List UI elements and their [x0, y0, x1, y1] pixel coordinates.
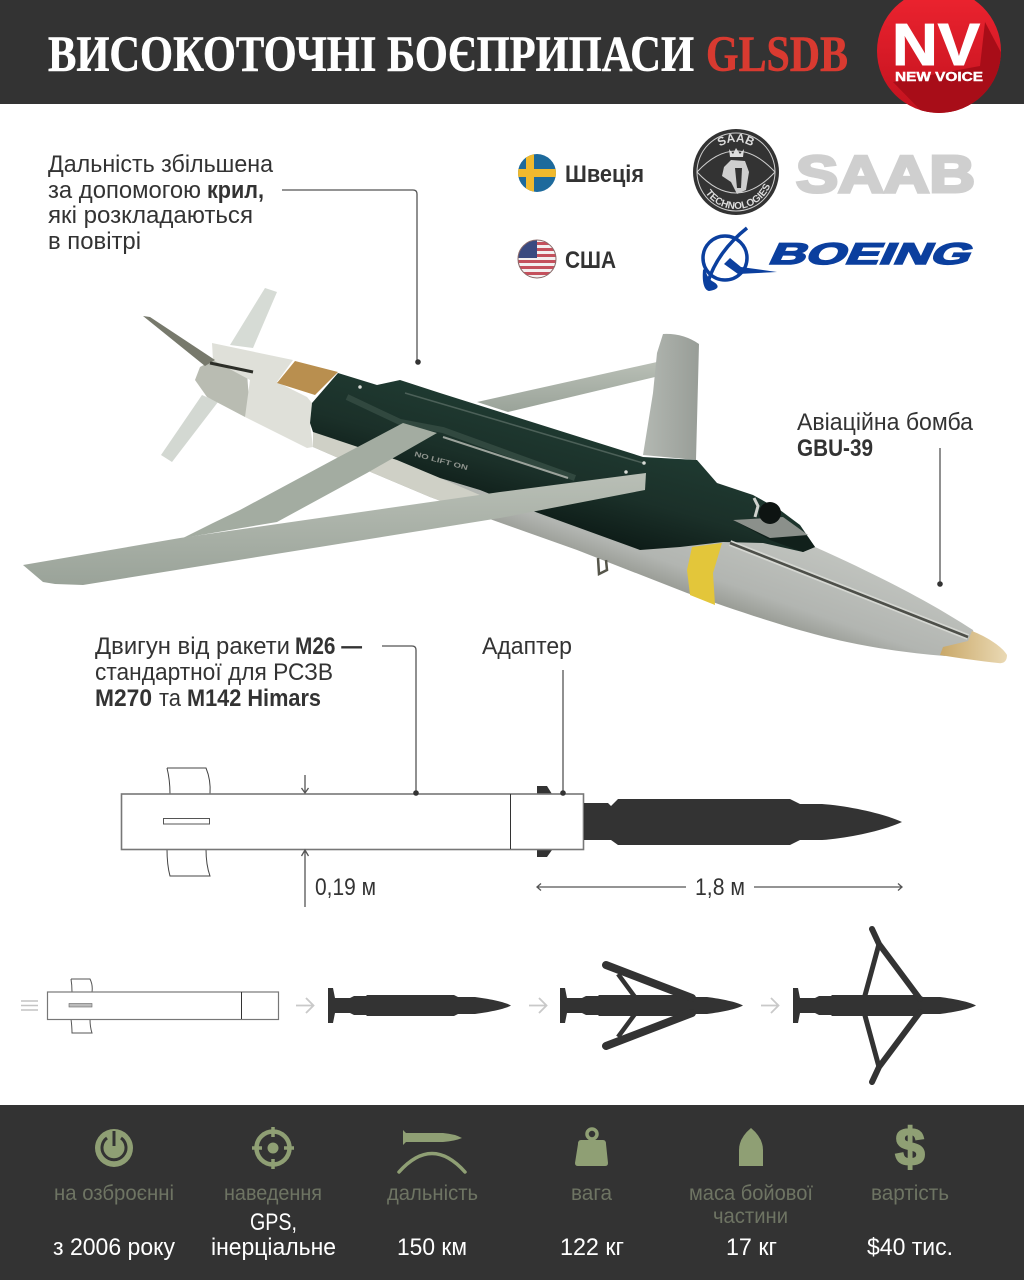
callout line: motor — [382, 646, 419, 796]
tail actuator — [210, 363, 253, 372]
panel: specifications — [0, 1105, 1024, 1280]
stage: bomb separated — [328, 988, 511, 1023]
text block: wings callout: крил, — [207, 177, 264, 204]
stencil text: NO LIFT ON — [413, 451, 468, 472]
title: GLSDB — [706, 27, 848, 83]
black-green strake — [310, 373, 815, 552]
stage: wings deployed — [793, 929, 976, 1082]
light aft underside — [313, 432, 487, 518]
text block: wings callout — [48, 151, 274, 255]
adapter fins — [537, 786, 552, 857]
text block: wings callout: в повітрі — [48, 228, 141, 255]
seeker plate — [733, 498, 815, 552]
spec: guidance — [211, 1127, 336, 1261]
icon: warhead — [739, 1128, 763, 1166]
white section — [212, 343, 313, 448]
logo: NV New Voice: NEW VOICE — [895, 70, 983, 84]
photo: GBU-39 bomb with deployed wings — [23, 288, 1007, 663]
spec: weight — [560, 1129, 624, 1261]
country: USA: США — [565, 247, 616, 274]
spec: warhead mass: маса бойової — [689, 1182, 813, 1205]
spec: warhead mass: частини — [713, 1205, 788, 1228]
callout line: wings — [282, 190, 421, 365]
front wing: lower left — [183, 423, 437, 538]
strake rails — [347, 397, 575, 478]
vertical wing tip — [643, 334, 699, 460]
callout line: adapter — [560, 670, 566, 796]
spec: cost — [867, 1118, 953, 1261]
logo: Boeing — [703, 228, 981, 291]
country: Sweden: Швеція — [565, 161, 644, 188]
slot — [164, 818, 210, 824]
arrow 1 — [296, 998, 314, 1013]
logo: Saab Technologies badge — [693, 129, 779, 215]
spec: warhead mass — [689, 1128, 813, 1261]
spec: warhead mass: 17 кг — [726, 1234, 777, 1261]
nose rail — [730, 543, 968, 637]
spec: guidance: наведення — [224, 1182, 322, 1205]
logo: NV New Voice — [877, 0, 1005, 120]
icon: weight — [575, 1129, 608, 1166]
text block: wings callout: за допомогою — [48, 177, 201, 204]
logo: Saab Technologies badge: SAAB — [718, 134, 754, 146]
text block: engine: стандартної для РСЗВ — [95, 659, 333, 686]
spec: weight: вага — [571, 1182, 612, 1205]
rear wing — [477, 362, 657, 412]
text block: engine: M26 — — [295, 633, 362, 660]
spec: guidance: інерціальне — [211, 1234, 336, 1261]
icon: target — [252, 1127, 294, 1169]
tail fin: upper — [230, 288, 277, 348]
dimension: diameter: 0,19 м — [315, 874, 376, 901]
diagram: GLSDB in launch configuration — [122, 646, 902, 907]
rocket motor fins — [167, 768, 210, 876]
spec: cost: $40 тис. — [867, 1234, 953, 1261]
front wing: main — [23, 473, 646, 585]
bomb silhouette — [584, 799, 902, 845]
text: adapter: Адаптер — [482, 633, 572, 660]
logo: Boeing: BOEING — [764, 236, 981, 271]
spec: range — [387, 1130, 478, 1261]
yellow band — [687, 543, 722, 605]
spec: range: дальність — [387, 1182, 478, 1205]
header bar — [0, 0, 1024, 120]
icon: dollar: $ — [895, 1118, 925, 1177]
text block: engine: Двигун від ракети — [95, 633, 290, 660]
country: Sweden — [518, 154, 644, 192]
text block: engine: та — [159, 685, 182, 712]
text block: GBU-39: GBU-39 — [797, 435, 873, 462]
antenna — [143, 316, 215, 366]
text block: GBU-39 — [797, 409, 974, 462]
spec: range: 150 км — [397, 1234, 467, 1261]
text block: GBU-39: Авіаційна бомба — [797, 409, 974, 436]
icon: bomb and trajectory — [399, 1130, 465, 1172]
tail fin: lower — [161, 395, 218, 462]
text block: wings callout: які розкладаються — [48, 202, 253, 229]
bomb body — [313, 420, 975, 656]
dimension: length: 1,8 м — [695, 874, 745, 901]
stage: launch — [21, 979, 278, 1033]
spec: cost: вартість — [871, 1182, 949, 1205]
spec: in service — [53, 1129, 175, 1261]
spec: in service: з 2006 року — [53, 1234, 175, 1261]
tail cone — [195, 360, 250, 417]
logo: Saab wordmark: SAAB — [796, 146, 975, 204]
text block: engine: M142 Himars — [187, 685, 321, 712]
text block: engine: M270 — [95, 685, 152, 712]
stage: wings opening — [560, 965, 743, 1046]
logo: NV New Voice: NV — [892, 12, 980, 78]
text block: engine — [95, 633, 362, 712]
nose cone — [940, 631, 1007, 663]
callout line: GBU-39 — [937, 448, 943, 587]
spec: guidance: GPS, — [250, 1209, 297, 1236]
motor body — [122, 794, 584, 850]
spec: in service: на озброєнні — [54, 1182, 174, 1205]
icon: power — [95, 1129, 133, 1167]
arrow 3 — [761, 998, 778, 1013]
rivets — [360, 387, 644, 472]
spec: weight: 122 кг — [560, 1234, 624, 1261]
title: ВИСОКОТОЧНІ БОЄПРИПАСИ — [48, 27, 694, 83]
dimension: length — [537, 874, 902, 901]
sling lug — [598, 558, 607, 574]
dimension: diameter — [302, 775, 376, 907]
text block: wings callout: Дальність збільшена — [48, 151, 274, 178]
gold panel — [277, 361, 338, 395]
sequence: launch stages — [21, 929, 976, 1082]
arrow 2 — [529, 998, 546, 1013]
country: USA — [518, 240, 616, 278]
logo: Saab Technologies badge: TECHNOLOGIES — [706, 184, 770, 209]
